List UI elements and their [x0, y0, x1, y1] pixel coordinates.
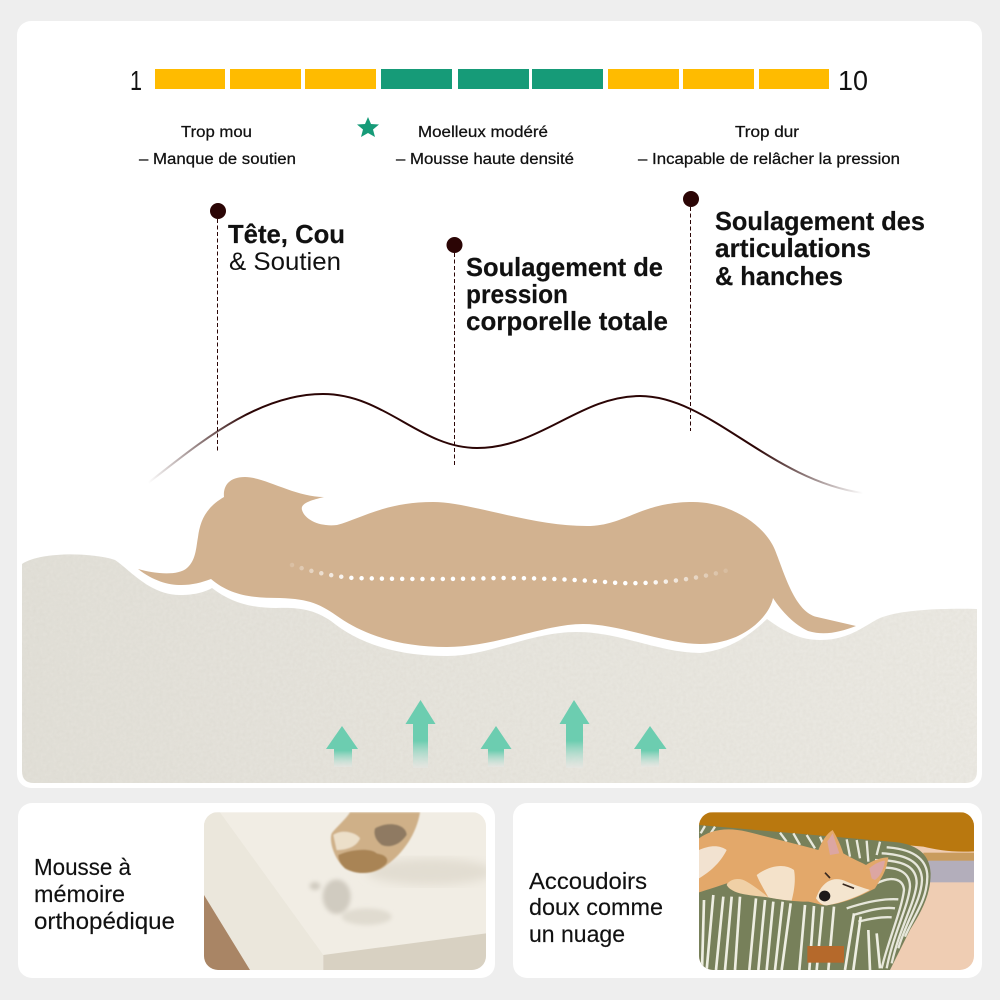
callout: joints and hips: articulations [715, 233, 871, 263]
dog silhouette [138, 477, 856, 647]
bed side stripes [847, 847, 927, 968]
label: too soft: – Manque de soutien [139, 151, 296, 168]
dog belly [699, 846, 727, 878]
callout: joints and hips [683, 191, 925, 431]
support arrows [326, 700, 666, 768]
callout: head and neck: Tête, Cou [228, 219, 345, 249]
firmness scale [130, 65, 868, 96]
dog paw [727, 879, 768, 897]
callout: full body pressure: corporelle totale [466, 306, 668, 336]
caption: memory foam: Mousse à [34, 854, 131, 880]
label: moderate softness: Moelleux modéré [418, 124, 548, 141]
callout: head and neck [210, 203, 345, 452]
scale start number: 1 [130, 65, 142, 96]
panel: memory foam [18, 803, 495, 978]
label: moderate softness [396, 124, 574, 168]
bed body [699, 825, 931, 970]
caption: armrests: doux comme [529, 894, 663, 920]
callout: full body pressure: pression [466, 279, 568, 309]
callout: head and neck: & Soutien [229, 248, 341, 276]
dog on bed [699, 829, 888, 905]
dog muzzle [816, 879, 870, 905]
label: too soft: Trop mou [181, 124, 252, 141]
callout: full body pressure [446, 237, 668, 465]
callout: joints and hips: Soulagement des [715, 206, 925, 236]
bed rear stripes [701, 826, 880, 862]
spine dots [292, 565, 735, 583]
label: too firm: Trop dur [735, 124, 799, 141]
caption: memory foam [34, 854, 175, 934]
icon: star [357, 117, 379, 137]
label: too firm: – Incapable de relâcher la pression [638, 151, 900, 168]
label: too firm [638, 124, 900, 168]
photo: paw on foam [204, 812, 493, 970]
photo: dog on striped bed [699, 812, 974, 970]
scale end number: 10 [838, 65, 868, 96]
panel: cushioned armrests [513, 803, 982, 978]
bed front stripes [702, 895, 880, 970]
caption: armrests: un nuage [529, 921, 625, 947]
label: too soft [139, 124, 296, 168]
callout: joints and hips: & hanches [715, 261, 843, 291]
caption: memory foam: mémoire [34, 881, 125, 907]
memory foam mattress [22, 554, 977, 783]
pressure curve [148, 394, 863, 493]
dog chest [757, 866, 795, 901]
callout: full body pressure: Soulagement de [466, 252, 663, 282]
caption: armrests [529, 868, 663, 947]
caption: memory foam: orthopédique [34, 908, 175, 934]
main panel [17, 21, 982, 788]
bed label [807, 946, 844, 963]
paw print [310, 879, 392, 925]
paw [331, 812, 420, 873]
scale segments [155, 69, 829, 89]
label: moderate softness: – Mousse haute densité [396, 151, 574, 168]
caption: armrests: Accoudoirs [529, 868, 647, 894]
